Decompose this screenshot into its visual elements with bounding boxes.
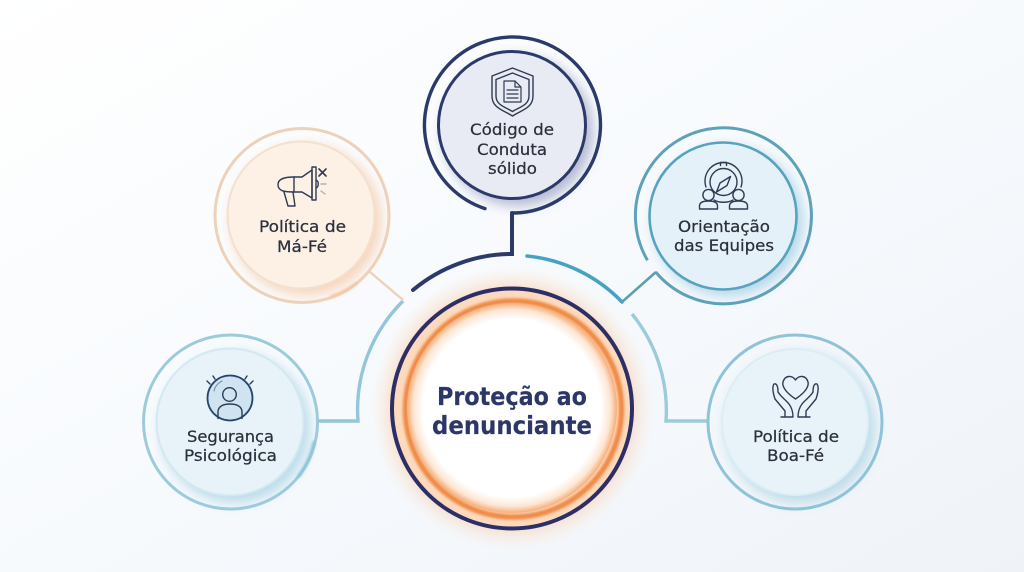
- label: [753, 427, 839, 465]
- connector: Orientação das Equipes to hub arc: [527, 256, 656, 302]
- label: Código de: [470, 120, 554, 139]
- title: [432, 382, 592, 440]
- panel: Segurança Psicológica: [144, 335, 318, 509]
- label: [184, 427, 277, 465]
- label: Conduta: [477, 140, 547, 159]
- icon: megaphone with cross: [278, 167, 326, 206]
- panel: Código de Conduta sólido: [424, 37, 600, 213]
- icon: compass and two people: [700, 162, 748, 209]
- label: Política de: [753, 427, 839, 446]
- label: [259, 217, 346, 256]
- panel: central hub: [370, 266, 654, 550]
- connector: Segurança Psicológica to hub arc: [317, 301, 403, 421]
- icon: hands holding a heart: [773, 376, 818, 417]
- label: Segurança: [187, 427, 274, 446]
- panel: Política de Boa-Fé: [708, 335, 882, 509]
- label: [674, 217, 774, 255]
- label: Má-Fé: [277, 237, 327, 256]
- label: Boa-Fé: [767, 446, 824, 465]
- icon: person in a circle: [207, 376, 253, 420]
- label: das Equipes: [674, 236, 774, 255]
- icon: shield with document: [492, 68, 533, 116]
- connector: Política de Boa-Fé to hub arc: [632, 314, 708, 421]
- connector: Política de Má-Fé to hub arc: [370, 272, 403, 300]
- title: Proteção ao: [437, 382, 587, 411]
- panel: Orientação das Equipes: [635, 128, 811, 304]
- label: Política de: [259, 217, 346, 236]
- label: Psicológica: [184, 446, 277, 465]
- panel: Política de Má-Fé: [215, 128, 389, 302]
- label: [470, 120, 554, 178]
- label: Orientação: [678, 217, 770, 236]
- connector: Código de Conduta to hub arc: [413, 213, 512, 290]
- title: denunciante: [432, 411, 592, 440]
- label: sólido: [488, 159, 537, 178]
